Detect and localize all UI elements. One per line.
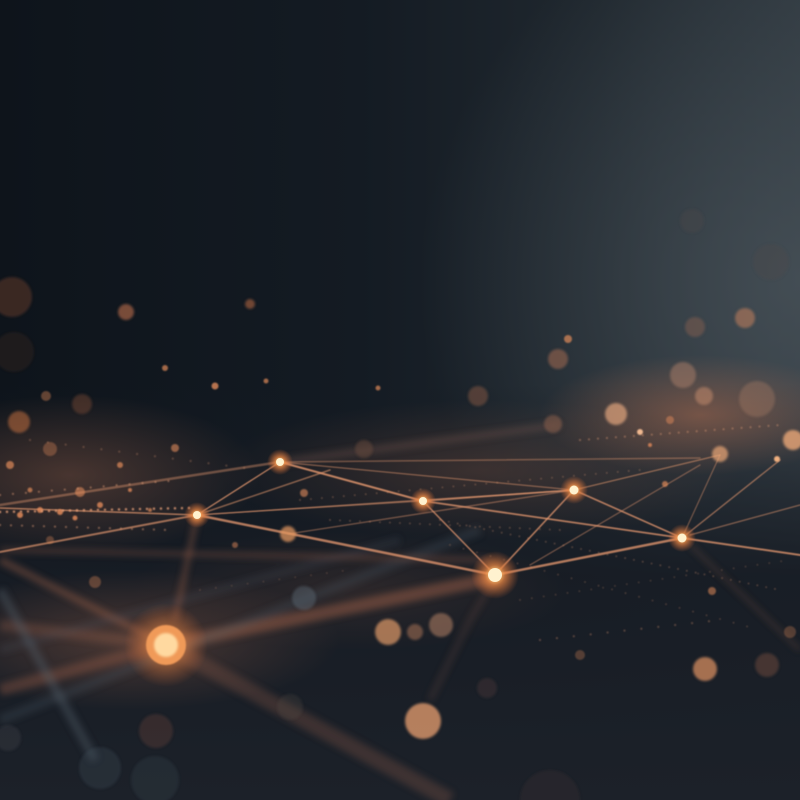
- glowing nodes: [124, 449, 696, 687]
- large bokeh circles: [0, 209, 800, 800]
- network lines: [0, 455, 800, 575]
- node: right of centre: [560, 476, 588, 504]
- node: large foreground: [124, 603, 208, 687]
- node: middle: [410, 488, 436, 514]
- blurred foreground beams: [0, 425, 800, 800]
- node: centre bright: [471, 551, 519, 599]
- node: left: [184, 502, 210, 528]
- small particles: [6, 335, 796, 660]
- fine particle dust: [0, 425, 790, 640]
- node: right: [668, 524, 696, 552]
- node: upper left: [267, 449, 293, 475]
- warm haze band: [0, 355, 800, 710]
- bokeh particles: [0, 209, 800, 800]
